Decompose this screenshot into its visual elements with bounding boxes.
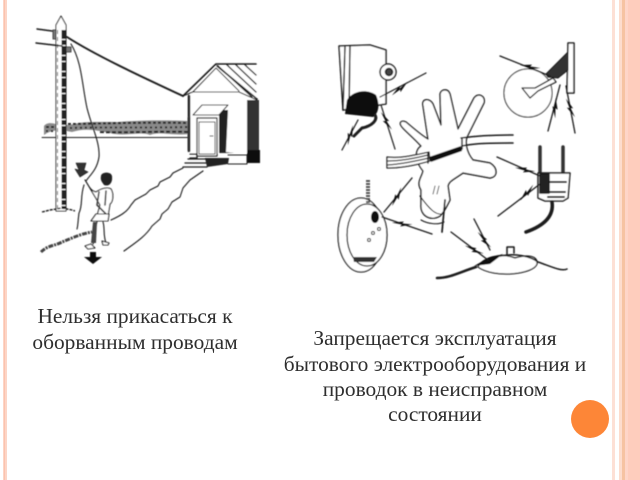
caption: left: Нельзя прикасаться к <box>37 304 233 328</box>
left decorative stripes <box>3 0 7 480</box>
icon: damaged plug <box>497 147 570 232</box>
caption: right: Запрещается эксплуатация <box>313 326 557 350</box>
caption: right: проводок в неисправном <box>323 377 548 401</box>
house <box>183 64 260 167</box>
icon: ground arrow <box>84 252 102 264</box>
grass in the foreground <box>41 232 92 252</box>
caption: right <box>284 326 586 426</box>
orange decorative circle <box>571 400 609 438</box>
path to the house <box>111 168 203 251</box>
caption: right: бытового электрооборудования и <box>284 352 586 376</box>
caption: left: оборванным проводам <box>32 330 238 354</box>
illustration: boy touching a fallen wire near a house <box>36 16 260 264</box>
caption: left <box>32 304 238 354</box>
boy <box>85 173 113 249</box>
icon: broken lamp holder <box>500 43 575 133</box>
icon: damaged socket box <box>339 45 426 150</box>
icon: utility pole <box>36 16 75 212</box>
icon: hand <box>400 90 496 232</box>
icon: damaged inline switch <box>437 219 567 278</box>
right decorative stripes <box>612 0 640 480</box>
treeline on the horizon <box>42 120 189 138</box>
caption: right: состоянии <box>388 402 482 426</box>
fallen wire <box>71 44 99 229</box>
illustration: faulty electrical equipment around a hand <box>338 43 575 278</box>
lightning bolts marking the faults <box>343 60 575 258</box>
icon: warning arrow pointing at the hand <box>75 163 88 177</box>
wire from pole to house <box>67 37 183 96</box>
icon: damaged round outlet <box>338 178 432 272</box>
icon: frayed cable across the palm <box>387 135 513 168</box>
